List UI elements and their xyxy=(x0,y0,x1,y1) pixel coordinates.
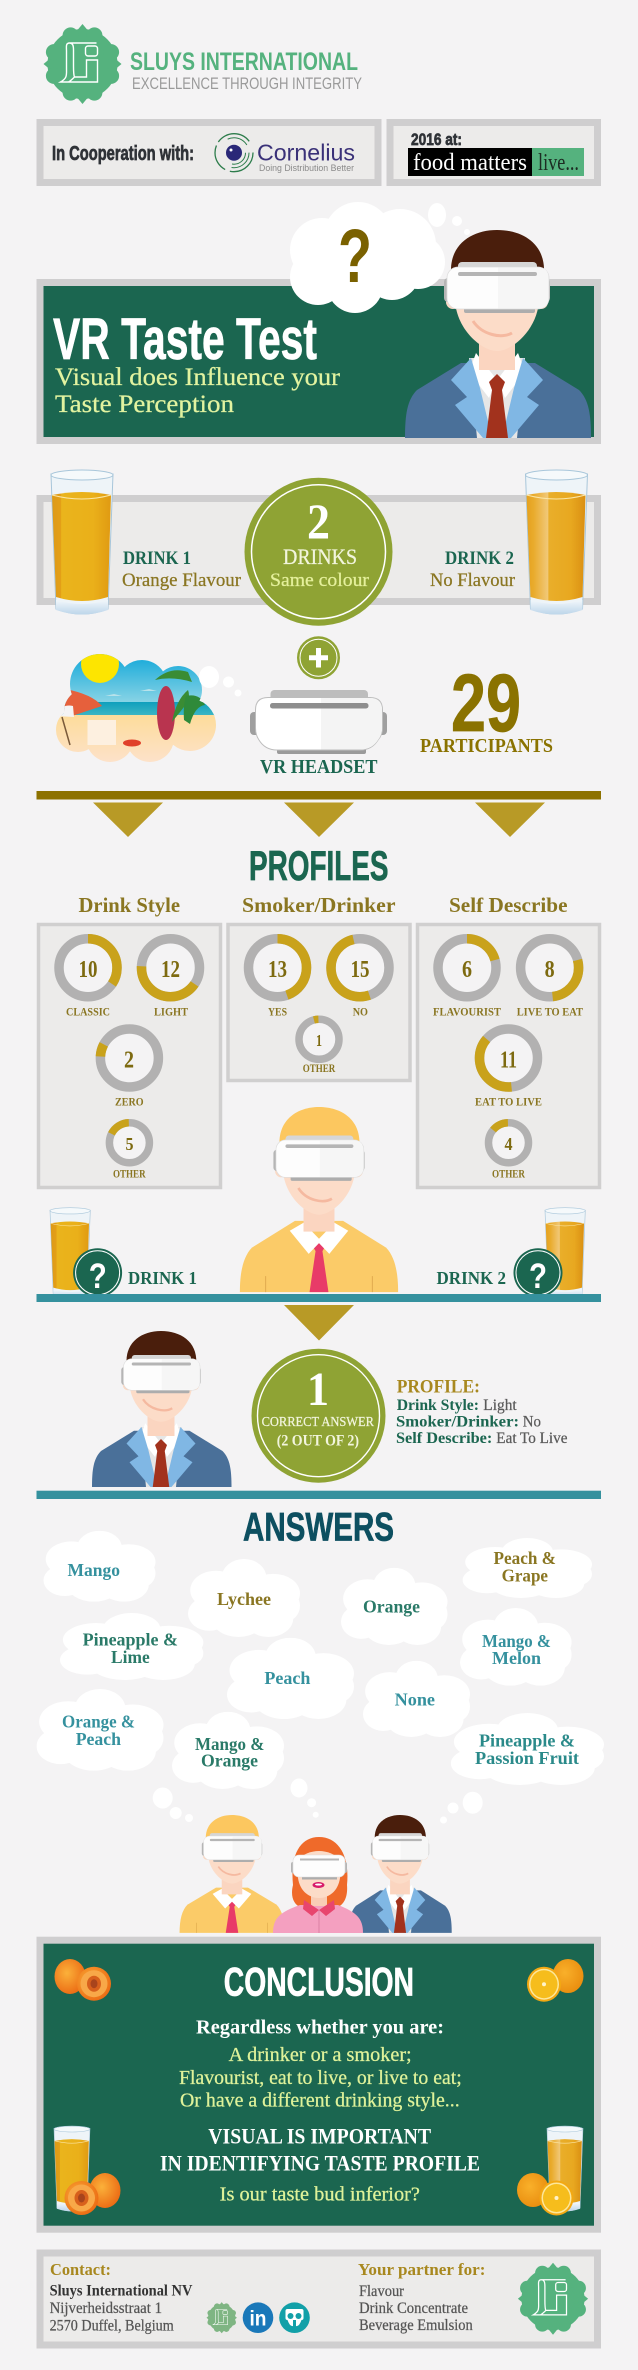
answer cloud: Lychee xyxy=(188,1559,300,1637)
icon: Sluys badge xyxy=(44,24,122,104)
donut: live to eat: LIVE TO EAT xyxy=(517,1005,583,1019)
conditions: Or have a different drinking style... xyxy=(180,2090,460,2112)
arrow: down xyxy=(284,1305,354,1340)
answer cloud: Orange xyxy=(341,1568,448,1645)
conditions: A drinker or a smoker; xyxy=(229,2044,412,2066)
donut: live to eat xyxy=(517,939,583,1019)
event year: 2016 at: xyxy=(411,130,462,149)
answer cloud: Mango: Mango xyxy=(68,1560,120,1580)
donut: other: 1 xyxy=(316,1031,322,1050)
drink 1 label: Orange Flavour xyxy=(122,570,242,591)
figure: man in suit xyxy=(92,1331,232,1487)
callout: 1 correct answer xyxy=(252,1349,386,1483)
contact xyxy=(50,2260,193,2334)
icon: glass and peaches xyxy=(54,2126,120,2215)
icon: Sluys badge xyxy=(518,2263,588,2335)
callout: 2 drinks xyxy=(244,478,392,626)
icon: Cornelius logo xyxy=(215,134,253,172)
callout: 2 drinks: 2 xyxy=(307,493,330,549)
key message: IN IDENTIFYING TASTE PROFILE xyxy=(160,2151,480,2176)
figure: man in suit xyxy=(349,1815,452,1933)
donut: zero: 2 xyxy=(124,1048,134,1074)
text block: profile: No xyxy=(523,1414,541,1431)
figure: blond man xyxy=(180,1815,284,1933)
donut: no xyxy=(331,939,389,1019)
key message xyxy=(160,2123,480,2176)
donut: other: OTHER xyxy=(492,1167,525,1181)
answer cloud: Mango xyxy=(44,1531,156,1602)
lead: Regardless whether you are: xyxy=(196,2016,444,2038)
icon: peaches top left xyxy=(54,1959,111,2001)
tagline: EXCELLENCE THROUGH INTEGRITY xyxy=(132,75,362,93)
donut: zero xyxy=(100,1029,158,1109)
figure: man in VR headset xyxy=(405,230,591,438)
logo: Sluys International xyxy=(44,24,362,104)
drink 1 label xyxy=(122,548,242,591)
subtitle: Visual does Influence your xyxy=(55,364,341,391)
icon: plus xyxy=(297,636,340,679)
icon: oranges top right xyxy=(527,1959,584,2002)
heading: Self Describe xyxy=(449,893,568,917)
text block: profile: PROFILE: xyxy=(397,1377,480,1398)
text block: profile: Smoker/Drinker: xyxy=(396,1414,519,1431)
heading: CONCLUSION xyxy=(224,1961,414,2005)
answer cloud: Peach: Peach xyxy=(264,1668,310,1688)
donut: light: 12 xyxy=(161,957,180,983)
text block: profile: Self Describe: xyxy=(396,1430,492,1447)
thought cloud xyxy=(290,202,470,313)
answer cloud: Peach and Grape: Grape xyxy=(502,1566,548,1586)
stat: participants xyxy=(420,658,553,757)
figures: three tasters xyxy=(180,1815,452,1933)
text block: profile xyxy=(396,1377,568,1447)
donut: no: NO xyxy=(353,1005,368,1019)
drink 2 label: DRINK 2 xyxy=(445,548,514,569)
key message: VISUAL IS IMPORTANT xyxy=(208,2123,431,2148)
panel: drink style xyxy=(38,893,220,1188)
stat: participants: PARTICIPANTS xyxy=(420,735,553,757)
figure: woman xyxy=(273,1837,363,1933)
Cornelius tagline: Doing Distribution Better xyxy=(259,163,354,174)
answer cloud: Orange and Peach xyxy=(37,1689,164,1771)
icon: question right: ? xyxy=(529,1257,547,1296)
answer cloud: Orange: Orange xyxy=(363,1597,420,1617)
icon: glass drink 1 xyxy=(51,470,113,614)
icon: VR headset xyxy=(250,690,387,754)
drink 2 label xyxy=(430,548,516,591)
company name: SLUYS INTERNATIONAL xyxy=(130,48,358,76)
donut: classic xyxy=(59,939,117,1019)
callout: 2 drinks: DRINKS xyxy=(283,544,357,569)
heading: Smoker/Drinker xyxy=(242,893,396,917)
donut: yes: YES xyxy=(268,1005,287,1019)
donut: other xyxy=(299,1019,339,1075)
answer cloud: Mango and Orange xyxy=(172,1712,284,1789)
Cornelius wordmark: Cornelius xyxy=(257,140,355,166)
donut: light: LIGHT xyxy=(154,1005,188,1019)
donut: classic: CLASSIC xyxy=(66,1005,110,1019)
donut: other: OTHER xyxy=(113,1167,146,1181)
partner: Beverage Emulsion xyxy=(359,2317,473,2334)
text block: profile: Eat To Live xyxy=(496,1430,568,1447)
donut: other xyxy=(109,1123,149,1181)
answer cloud: Pineapple and Passion Fruit xyxy=(451,1713,604,1785)
heading: profiles: PROFILES xyxy=(249,842,388,889)
answer cloud: Orange and Peach: Peach xyxy=(76,1729,121,1749)
contact: Contact: xyxy=(50,2260,111,2279)
answer cloud: Mango and Orange: Orange xyxy=(201,1751,258,1771)
callout: 1 correct answer: (2 OUT OF 2) xyxy=(277,1433,359,1450)
donut: eat to live: 11 xyxy=(500,1048,517,1074)
heading: Drink Style xyxy=(78,893,180,917)
answer cloud: Mango and Melon: Melon xyxy=(492,1648,541,1668)
drink 1 label: DRINK 1 xyxy=(128,1268,197,1288)
subtitle xyxy=(55,364,341,418)
arrows: three down xyxy=(93,802,545,837)
panel: self describe xyxy=(418,893,600,1188)
partner: Drink Concentrate xyxy=(359,2300,468,2317)
donut: flavourist: 6 xyxy=(462,957,472,983)
answer cloud: Pineapple and Lime xyxy=(60,1613,203,1680)
donut: yes: 13 xyxy=(268,957,287,983)
contact: Sluys International NV xyxy=(50,2283,193,2300)
icon: glass left xyxy=(50,1208,90,1299)
answer cloud: None xyxy=(363,1661,470,1737)
conditions xyxy=(179,2044,462,2112)
donut: zero: ZERO xyxy=(115,1095,144,1109)
icon: slideshare xyxy=(279,2302,310,2333)
conditions: Flavourist, eat to live, or live to eat; xyxy=(179,2067,462,2089)
donut: other: 4 xyxy=(504,1134,512,1154)
donut: eat to live: EAT TO LIVE xyxy=(475,1095,542,1109)
panel: smoker drinker xyxy=(228,893,410,1080)
text block: profile: Drink Style: xyxy=(397,1397,479,1414)
question mark: ? xyxy=(338,214,372,299)
contact: Nijverheidsstraat 1 xyxy=(50,2300,162,2317)
answer cloud: Pineapple and Lime: Lime xyxy=(111,1647,150,1667)
title: VR Taste Test xyxy=(53,307,317,372)
icon: glass right xyxy=(545,1208,585,1299)
subtitle: Taste Perception xyxy=(55,391,235,418)
donut: light xyxy=(142,939,200,1019)
donut: yes xyxy=(248,939,306,1019)
answer cloud: Pineapple and Lime: Pineapple & xyxy=(83,1630,178,1650)
drink 2 label: DRINK 2 xyxy=(436,1268,506,1288)
icon: question left: ? xyxy=(89,1257,107,1296)
Food Matters logo xyxy=(408,148,584,176)
partner: Your partner for: xyxy=(358,2260,485,2279)
icon: linkedin xyxy=(243,2302,273,2333)
answer cloud: Pineapple and Passion Fruit: Pineapple & xyxy=(479,1731,575,1751)
icon: question left xyxy=(73,1248,122,1297)
donut: other xyxy=(488,1123,528,1181)
donut: no: 15 xyxy=(350,957,370,983)
answer cloud: Peach xyxy=(227,1638,354,1719)
partner: Flavour xyxy=(359,2283,405,2300)
answer cloud: Peach and Grape: Peach & xyxy=(494,1548,556,1568)
drink 2 label: No Flavour xyxy=(430,570,516,591)
donut: live to eat: 8 xyxy=(545,957,555,983)
donut: eat to live xyxy=(475,1029,542,1109)
panel: two drinks xyxy=(40,470,598,626)
donut: other: OTHER xyxy=(303,1061,336,1075)
answer cloud: Mango and Melon xyxy=(460,1608,572,1686)
panel: event xyxy=(390,122,598,182)
icon: website xyxy=(206,2302,237,2333)
cooperation label: In Cooperation with: xyxy=(52,143,194,165)
Food Matters logo: live... xyxy=(538,150,579,176)
panel: footer xyxy=(40,2253,598,2345)
answer cloud: Pineapple and Passion Fruit: Passion Fruit xyxy=(475,1748,579,1768)
partner xyxy=(358,2260,485,2334)
figure: blond man tasting xyxy=(240,1107,398,1292)
answer cloud: Peach and Grape xyxy=(463,1538,592,1598)
drink 1 label: DRINK 1 xyxy=(123,548,191,569)
answer cloud: Orange and Peach: Orange & xyxy=(62,1712,135,1732)
panel: conclusion xyxy=(40,1940,598,2229)
answer cloud: Lychee: Lychee xyxy=(217,1589,271,1609)
answer cloud: Mango and Orange: Mango & xyxy=(195,1734,264,1754)
heading: answers: ANSWERS xyxy=(243,1506,394,1550)
VR headset label: VR HEADSET xyxy=(260,756,378,778)
icon: glass and oranges xyxy=(517,2126,583,2216)
icon: glass drink 2 xyxy=(526,470,588,614)
panel: cooperation xyxy=(40,122,378,182)
answer cloud: None: None xyxy=(395,1690,435,1710)
Food Matters logo: food matters xyxy=(413,150,527,176)
icon: linkedin: in xyxy=(250,2308,266,2330)
callout: 2 drinks: Same colour xyxy=(270,570,370,591)
callout: 1 correct answer: 1 xyxy=(307,1363,329,1416)
thought bubbles xyxy=(153,1778,483,1824)
text block: profile: Light xyxy=(483,1397,517,1414)
contact: 2570 Duffel, Belgium xyxy=(50,2317,174,2334)
donut: flavourist xyxy=(433,939,501,1019)
answer cloud: Mango and Melon: Mango & xyxy=(482,1631,551,1651)
donut: flavourist: FLAVOURIST xyxy=(433,1005,501,1019)
icon: question right xyxy=(514,1248,562,1297)
question: Is our taste bud inferior? xyxy=(220,2184,420,2206)
callout: 1 correct answer: CORRECT ANSWER xyxy=(262,1415,375,1430)
panel: hero xyxy=(40,202,598,440)
donut: classic: 10 xyxy=(78,957,98,983)
illustration: beach thought xyxy=(56,654,242,762)
stat: participants: 29 xyxy=(451,658,521,749)
donut: other: 5 xyxy=(126,1134,134,1154)
